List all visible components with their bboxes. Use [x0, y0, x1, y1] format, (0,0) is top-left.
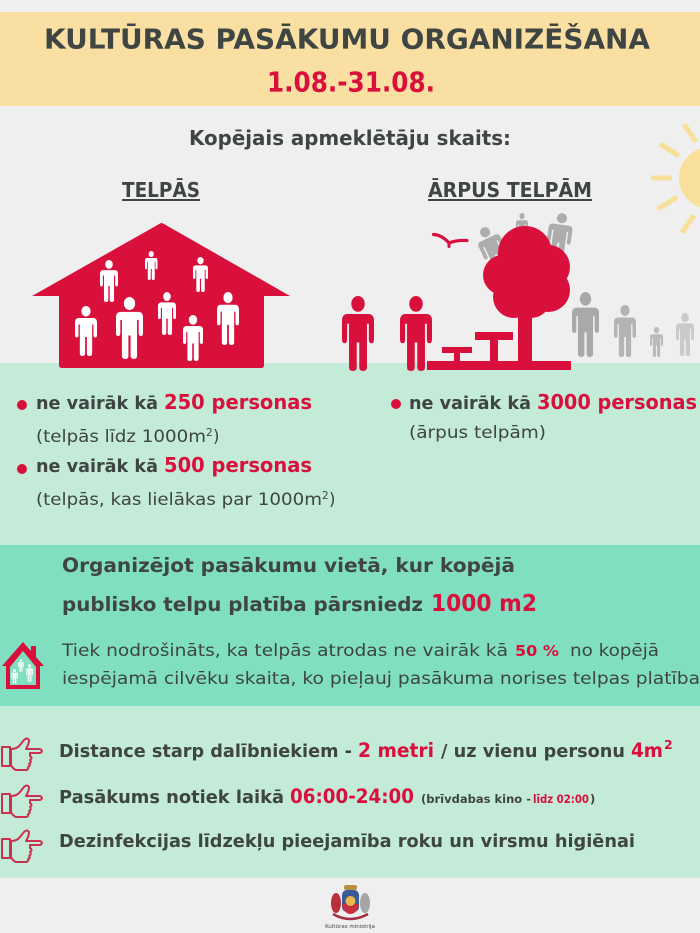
limit: indoors over 1000 m2: ) — [329, 490, 335, 509]
gray people right — [572, 292, 694, 357]
teal panel: large venue rule: iespējamā cilvēku skaita, ko pieļauj pasākuma norises telpas platība — [62, 669, 700, 689]
limit: indoors over 1000 m2: ne vairāk kā — [36, 457, 158, 477]
header band — [0, 12, 700, 106]
rule: distance — [2, 737, 673, 770]
gray people behind tree — [472, 212, 575, 276]
icon: bird — [434, 234, 467, 246]
icon: tree — [483, 226, 570, 362]
limit: indoors over 1000 m2: 2 — [322, 490, 329, 502]
limit: outdoors — [391, 390, 697, 442]
rule: distance: 2 metri — [358, 739, 434, 762]
footer: coat of arms and ministry name: Kultūras ministrija — [325, 924, 375, 930]
rule: distance: / uz vienu personu — [441, 741, 625, 762]
icon: house outline with people — [2, 642, 44, 689]
panel heading: Organizējot pasākumu vietā, kur kopējā — [62, 554, 515, 577]
heading: indoors: TELPĀS — [122, 178, 200, 202]
outdoor scene — [342, 212, 694, 371]
rule: distance: 4m — [631, 739, 663, 762]
title: KULTŪRAS PASĀKUMU ORGANIZĒŠANA — [44, 22, 650, 56]
rule: hours: ) — [590, 792, 595, 806]
limit: indoors up to 1000 m2: 250 personas — [164, 390, 312, 414]
rule: hours — [2, 785, 595, 817]
limit: indoors over 1000 m2: 500 personas — [164, 453, 312, 477]
panel body text: Tiek nodrošināts, ka telpās atrodas ne vairāk kā — [61, 641, 508, 661]
limit: indoors up to 1000 m2: ne vairāk kā — [36, 394, 158, 414]
rule: hours: līdz 02:00 — [533, 792, 589, 806]
teal panel: large venue rule: no kopējā — [570, 641, 659, 661]
limit: indoors up to 1000 m2: (telpās līdz 1000m — [36, 427, 206, 446]
rule: hours: 06:00-24:00 — [290, 785, 414, 808]
mint panel: rules list — [0, 706, 700, 878]
rule: hours: Pasākums notiek laikā — [59, 787, 284, 808]
teal panel: large venue rule — [0, 545, 700, 706]
icon: sun — [651, 124, 700, 233]
teal panel: large venue rule: publisko telpu platība pārsniedz — [62, 593, 423, 616]
rule: disinfectant: Dezinfekcijas līdzekļu pieejamība roku un virsmu higiēnai — [59, 831, 635, 852]
limit: indoors up to 1000 m2: ) — [213, 427, 219, 446]
limit: indoors over 1000 m2 — [17, 453, 335, 509]
limit: outdoors: 3000 personas — [537, 390, 697, 414]
limit: indoors over 1000 m2: (telpās, kas lielākas par 1000m — [36, 490, 322, 509]
limit: outdoors: (ārpus telpām) — [409, 423, 546, 442]
subheading: Kopējais apmeklētāju skaits: — [189, 126, 511, 150]
heading: outdoors: ĀRPUS TELPĀM — [428, 178, 592, 202]
limit: indoors up to 1000 m2: 2 — [206, 427, 213, 439]
date range: 1.08.-31.08. — [267, 66, 435, 98]
teal panel: large venue rule: 50 % — [515, 642, 559, 660]
red people — [342, 296, 432, 371]
rule: disinfectant — [2, 830, 635, 862]
icon: red house with people — [32, 223, 290, 368]
limit: indoors up to 1000 m2 — [17, 390, 312, 446]
icon: picnic table — [427, 332, 571, 370]
teal panel: large venue rule: 1000 m2 — [431, 589, 537, 617]
footer: coat of arms and ministry name — [325, 885, 375, 930]
rule: hours: (brīvdabas kino - — [421, 792, 531, 806]
rule: distance: 2 — [664, 737, 673, 752]
rule: distance: Distance starp dalībniekiem - — [59, 741, 352, 762]
limit: outdoors: ne vairāk kā — [409, 394, 531, 414]
mint panel: capacity limits — [0, 363, 700, 545]
